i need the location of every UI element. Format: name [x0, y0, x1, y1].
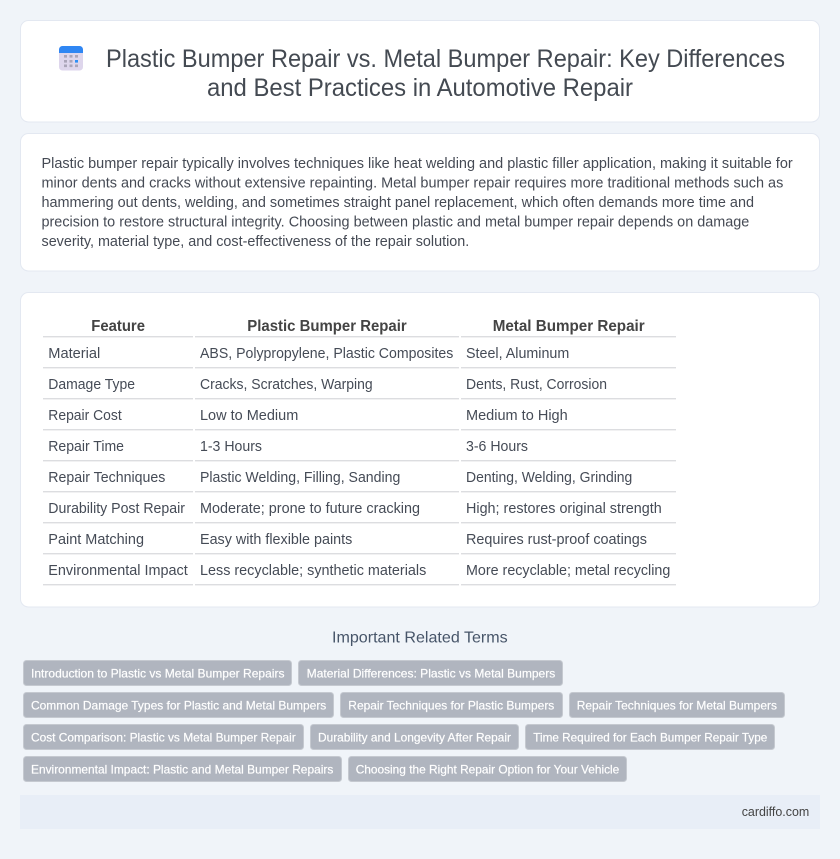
table row: repair time: Repair Time — [48, 439, 124, 455]
chip row 3: Time Required for Each Bumper Repair Type — [533, 730, 768, 744]
table row: paint matching: Paint Matching — [48, 532, 144, 548]
table row: material: Steel, Aluminum — [466, 346, 569, 362]
table row: repair techniques — [48, 470, 632, 486]
table header row: Metal Bumper Repair — [493, 318, 645, 335]
text block: summary paragraph: precision to restore structural integrity. Choosing between plastic and metal bumper repair depends on damage — [42, 214, 749, 230]
footer — [20, 795, 820, 829]
table row: repair cost — [48, 408, 568, 424]
panel: summary text — [20, 134, 820, 271]
table row: repair cost: Medium to High — [466, 408, 568, 424]
table row: durability post repair — [48, 501, 662, 517]
chip row 2 — [24, 692, 784, 718]
table row: material — [48, 346, 569, 362]
table row: repair cost: Repair Cost — [48, 408, 122, 424]
chip row 2: Repair Techniques for Metal Bumpers — [577, 698, 777, 712]
table row: repair time: 3-6 Hours — [466, 439, 528, 455]
panel: title card — [20, 20, 820, 122]
footer: cardiffo.com — [742, 805, 809, 819]
text block: summary paragraph: severity, material type, and cost-effectiveness of the repair solution. — [42, 234, 469, 250]
table row: material: Material — [48, 346, 100, 362]
heading: important related terms: Important Related Terms — [332, 630, 508, 647]
table row: paint matching: Easy with flexible paints — [200, 532, 352, 548]
chip row 3 — [24, 724, 774, 750]
text block: summary paragraph: minor dents and cracks without extensive repainting. Metal bumper repair requires more traditional methods such as — [42, 176, 783, 192]
table row: durability post repair: High; restores original strength — [466, 501, 662, 517]
table row: paint matching: Requires rust-proof coatings — [466, 532, 647, 548]
table row: repair techniques: Plastic Welding, Filling, Sanding — [200, 470, 400, 486]
table row: durability post repair: Moderate; prone to future cracking — [200, 501, 420, 517]
icon: calendar — [59, 46, 83, 70]
table row: damage type: Damage Type — [48, 377, 135, 393]
panel: comparison table — [20, 292, 820, 607]
chip row 3: Cost Comparison: Plastic vs Metal Bumper Repair — [31, 730, 296, 744]
text block: summary paragraph: hammering out dents, welding, and sometimes straight panel replacement, which often demands more time and — [42, 195, 754, 211]
chip row 2: Repair Techniques for Plastic Bumpers — [348, 698, 554, 712]
table row: repair time — [48, 439, 528, 455]
chip row 1: Material Differences: Plastic vs Metal Bumpers — [307, 666, 555, 680]
table row: damage type: Cracks, Scratches, Warping — [200, 377, 373, 393]
text block: summary paragraph — [42, 156, 793, 250]
title: and Best Practices in Automotive Repair — [207, 74, 634, 102]
chip row 1: Introduction to Plastic vs Metal Bumper Repairs — [31, 666, 284, 680]
table header row — [91, 318, 645, 335]
table row: damage type: Dents, Rust, Corrosion — [466, 377, 607, 393]
chip row 4: Environmental Impact: Plastic and Metal Bumper Repairs — [31, 762, 333, 776]
chip row 2: Common Damage Types for Plastic and Metal Bumpers — [31, 698, 326, 712]
chip row 4: Choosing the Right Repair Option for Your Vehicle — [356, 762, 620, 776]
text block: summary paragraph: Plastic bumper repair typically involves techniques like heat welding and plastic filler application, making it suitable for — [42, 156, 793, 172]
table header row: Feature — [91, 318, 145, 335]
table row: damage type — [48, 377, 607, 393]
table row: paint matching — [48, 532, 647, 548]
title: Plastic Bumper Repair vs. Metal Bumper Repair: Key Differences — [106, 45, 785, 73]
table row: durability post repair: Durability Post Repair — [48, 501, 185, 517]
chip row 3: Durability and Longevity After Repair — [318, 730, 511, 744]
table row: repair techniques: Denting, Welding, Grinding — [466, 470, 632, 486]
table row: environmental impact: More recyclable; metal recycling — [466, 563, 670, 579]
table row: repair time: 1-3 Hours — [200, 439, 262, 455]
panel: related term chips — [24, 660, 784, 782]
table row: repair cost: Low to Medium — [200, 408, 298, 424]
table row: environmental impact: Less recyclable; synthetic materials — [200, 563, 426, 579]
table header row: Plastic Bumper Repair — [247, 318, 407, 335]
table row: repair techniques: Repair Techniques — [48, 470, 165, 486]
table row: environmental impact — [48, 563, 670, 579]
chip row 1 — [24, 660, 562, 686]
table row: material: ABS, Polypropylene, Plastic Composites — [200, 346, 453, 362]
chip row 4 — [24, 756, 626, 782]
table row: environmental impact: Environmental Impact — [48, 563, 188, 579]
title — [106, 45, 785, 102]
